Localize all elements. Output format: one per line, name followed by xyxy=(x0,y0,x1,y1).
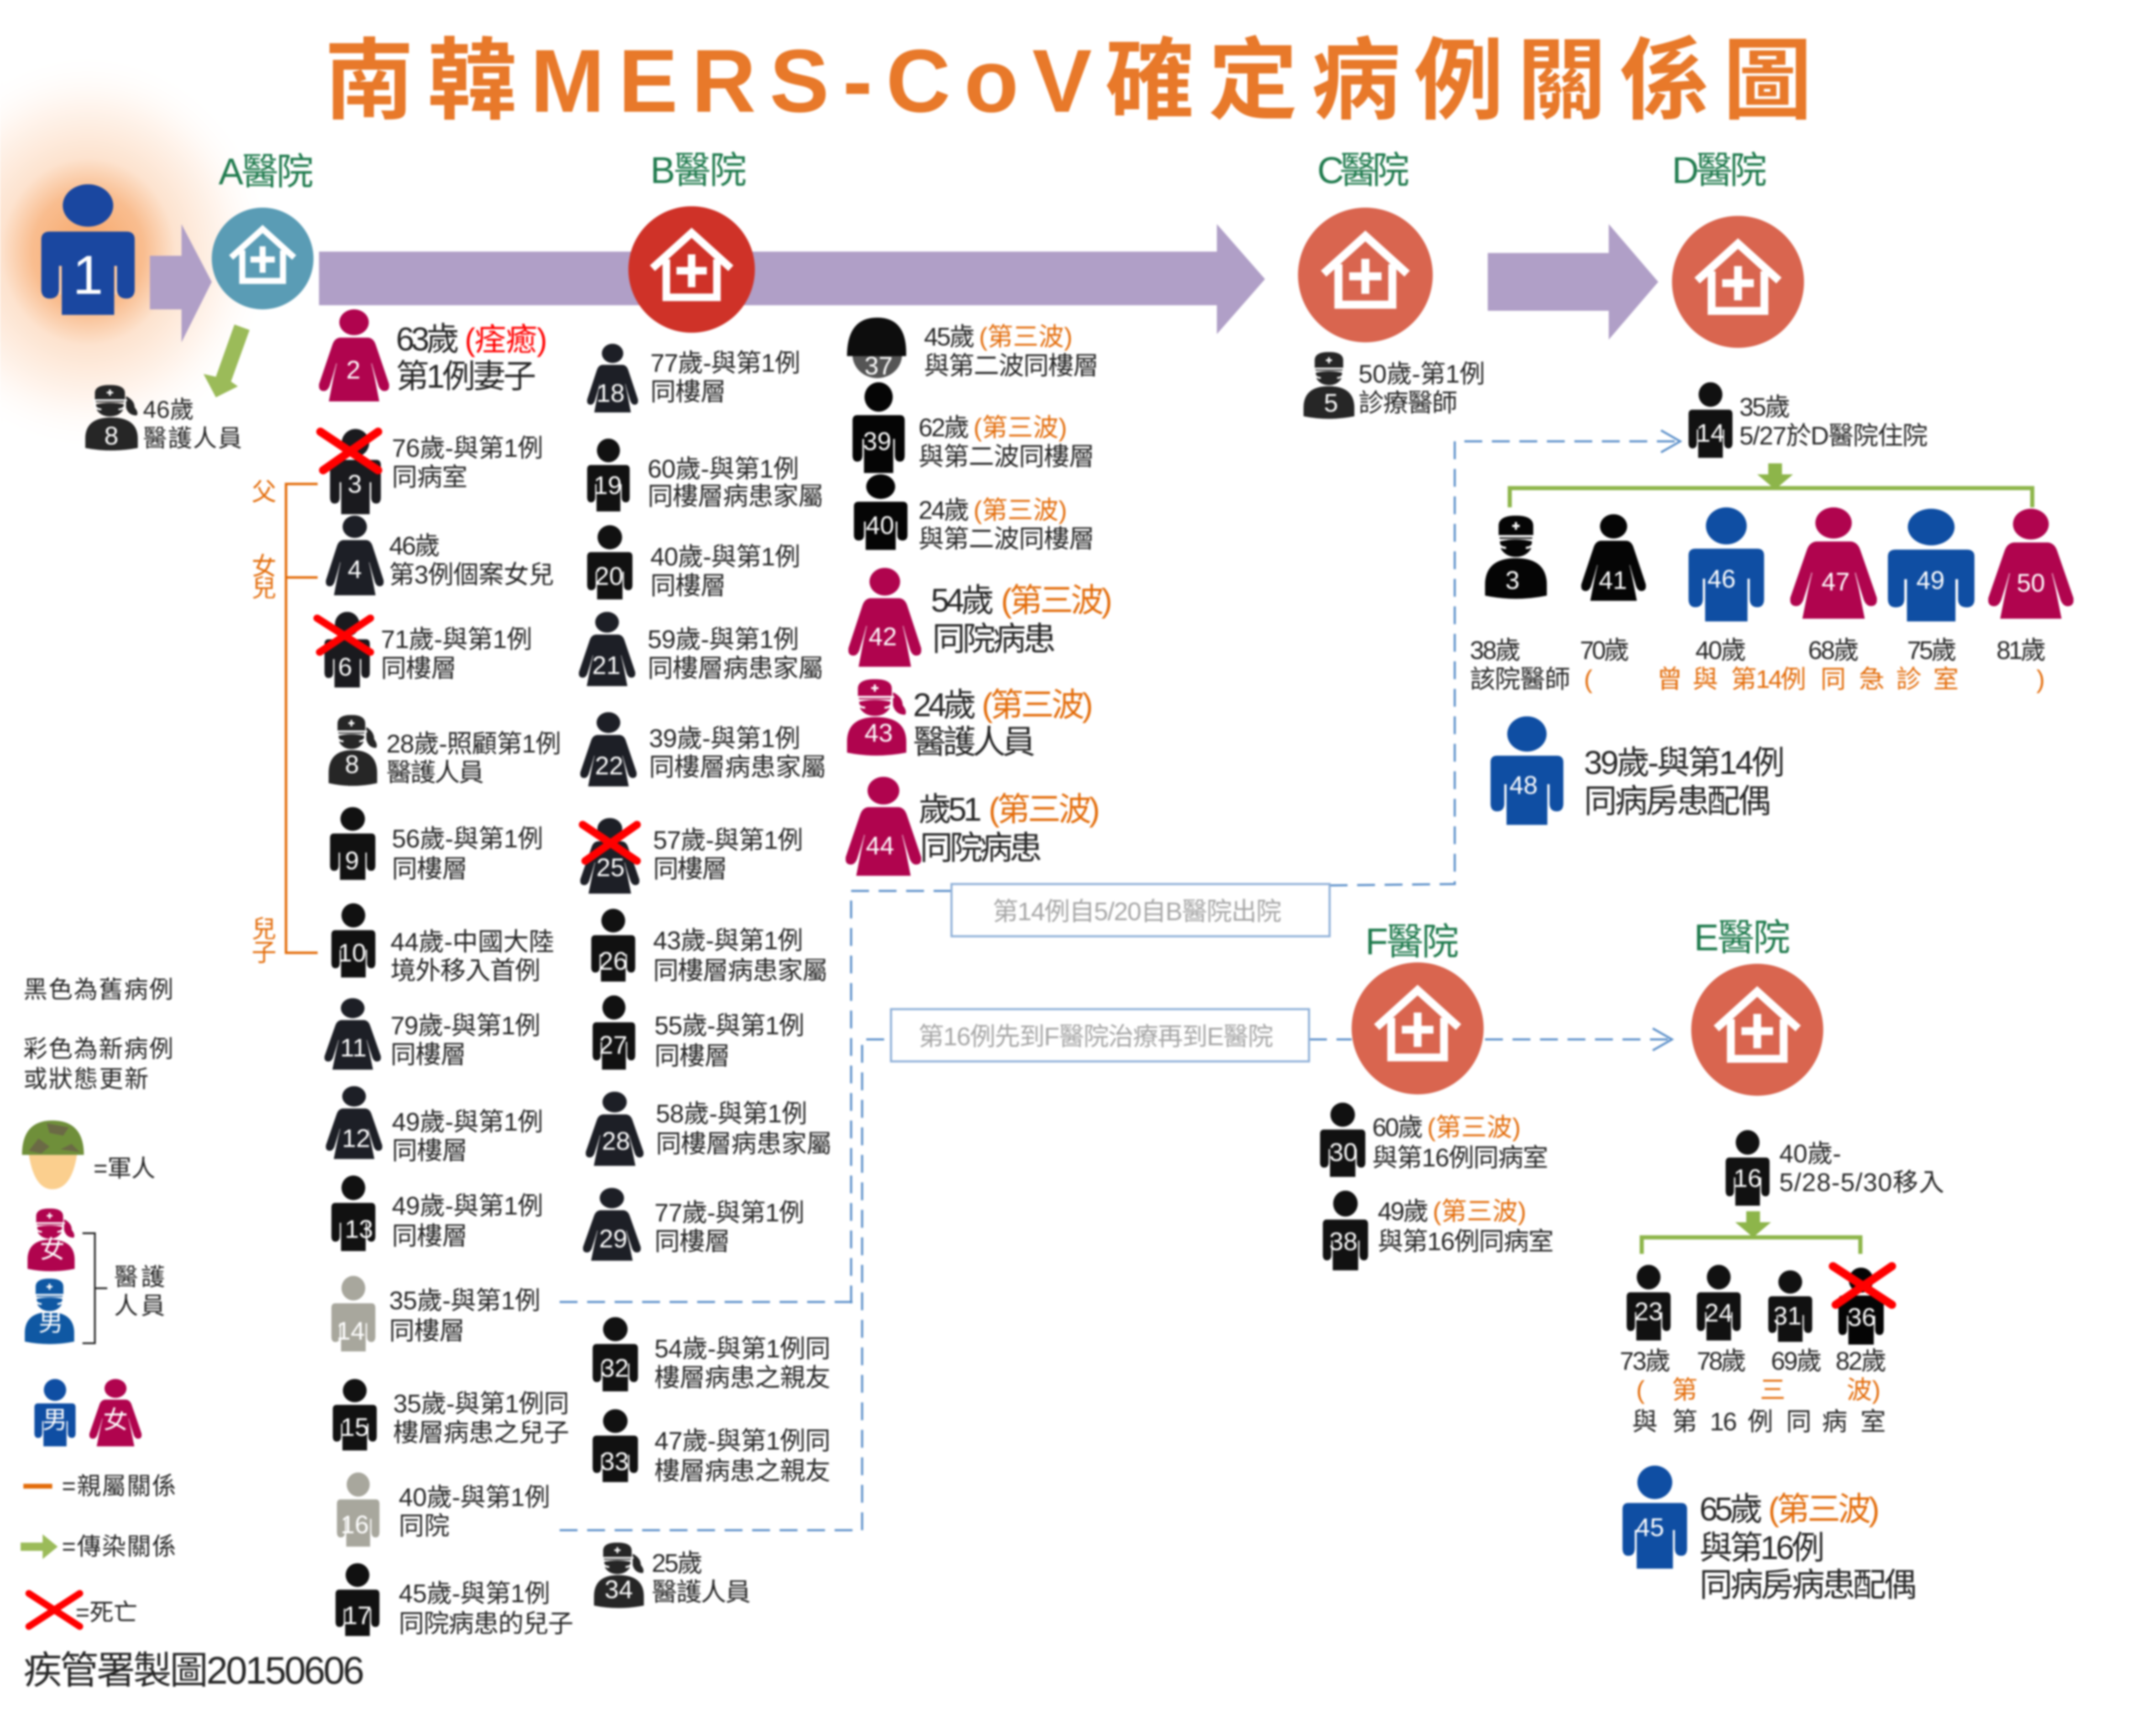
arrow: hospital A to hospital C xyxy=(319,224,1265,334)
case 21 xyxy=(579,612,824,686)
case 20: 40歲-與第1例 xyxy=(650,543,800,571)
case 3: 3 xyxy=(348,470,362,498)
case 8 A hospital nurse: 醫護人員 xyxy=(143,425,242,452)
case 26 xyxy=(591,909,828,985)
case 45: (第三波) xyxy=(1768,1491,1879,1528)
case 34: 醫護人員 xyxy=(652,1578,751,1606)
case 14: 35歲-與第1例 xyxy=(389,1286,540,1315)
ages row: 81歲 xyxy=(1997,636,2046,664)
case 40 xyxy=(854,474,1094,553)
case 40: 40 xyxy=(866,511,894,539)
case 14: 35歲 xyxy=(1739,393,1790,421)
case 30 xyxy=(1320,1102,1548,1177)
ages row xyxy=(1620,1347,1886,1375)
case 44: 歲51 xyxy=(919,792,982,828)
case 1 icon: 1 xyxy=(73,244,103,306)
panel: hospital D cases xyxy=(1470,382,2073,825)
case 43: 43 xyxy=(864,719,893,747)
note box: case 16 xyxy=(891,1009,1309,1061)
case 9: 同樓層 xyxy=(392,855,467,883)
case 44: 44 xyxy=(866,831,894,860)
case 6 xyxy=(317,612,532,687)
case 5: 5 xyxy=(1324,389,1338,417)
case 43: (第三波) xyxy=(982,687,1093,724)
case 4: 第3例個案女兒 xyxy=(389,560,554,589)
case 5: 診療醫師 xyxy=(1359,389,1458,417)
case 45: 同病房病患配偶 xyxy=(1700,1567,1917,1604)
case 50: 50 xyxy=(2017,569,2045,597)
case 42: 42 xyxy=(869,622,897,651)
case 3: 同病室 xyxy=(392,463,467,491)
family bracket: 父 xyxy=(251,479,277,506)
case 6: 71歲-與第1例 xyxy=(381,625,532,653)
case 4: 46歲 xyxy=(389,532,440,560)
case 47 xyxy=(1790,507,1877,619)
case 16: 16 xyxy=(1733,1164,1762,1192)
case 8: 醫護人員 xyxy=(387,758,484,787)
third wave note: ( xyxy=(1636,1376,1645,1404)
case 13: 同樓層 xyxy=(392,1222,467,1250)
case 32: 54歲-與第1例同 xyxy=(654,1335,831,1363)
case 38: 與第16例同病室 xyxy=(1378,1228,1554,1256)
case 17: 17 xyxy=(343,1601,372,1630)
hospital E: E醫院 xyxy=(1694,917,1790,958)
case 39: 62歲 xyxy=(919,413,969,442)
case 21: 同樓層病患家屬 xyxy=(648,654,824,682)
hospital F xyxy=(1352,921,1484,1094)
case 27: 27 xyxy=(599,1031,628,1059)
case 41: 41 xyxy=(1599,566,1627,594)
case 28: 58歲-與第1例 xyxy=(656,1099,807,1128)
case 2: (痊癒) xyxy=(465,322,547,357)
family bracket xyxy=(251,479,318,967)
case 2: 63歲 xyxy=(396,321,459,358)
case 24: 24 xyxy=(1705,1299,1733,1327)
case 11: 同樓層 xyxy=(391,1040,466,1069)
case 48: 39歲-與第14例 xyxy=(1584,745,1785,781)
case 16: 40歲- xyxy=(1779,1139,1841,1168)
note row: 曾與第14例同急診室 xyxy=(1657,665,1959,693)
third wave note xyxy=(1636,1376,1880,1404)
note row xyxy=(1470,665,2045,693)
ages row: 75歲 xyxy=(1907,636,1957,664)
legend: medical staff: 男 xyxy=(38,1309,63,1336)
case 34: 25歲 xyxy=(652,1549,703,1578)
case 25 xyxy=(580,818,803,893)
note row: ) xyxy=(2036,665,2045,693)
case 16: 同院 xyxy=(399,1512,450,1540)
case 2: 第1例妻子 xyxy=(396,359,536,395)
case 20: 同樓層 xyxy=(650,572,726,600)
hospital A xyxy=(212,151,314,309)
case 22: 22 xyxy=(595,752,623,780)
case 28: 28 xyxy=(602,1127,630,1155)
credit: 疾管署製圖20150606 xyxy=(23,1649,364,1692)
case 48: 48 xyxy=(1509,771,1538,799)
legend: family relation: =親屬關係 xyxy=(62,1473,176,1500)
case 34: 34 xyxy=(605,1575,633,1604)
panel: legend xyxy=(21,977,364,1692)
case 12: 12 xyxy=(342,1124,370,1153)
case 47: 47 xyxy=(1821,567,1850,596)
ages row: 78歲 xyxy=(1697,1347,1746,1375)
case 28: 同樓層病患家屬 xyxy=(656,1130,832,1158)
case 39: (第三波) xyxy=(973,413,1067,442)
note box: case 14: 第14例自5/20自B醫院出院 xyxy=(993,898,1282,926)
orange glow behind index case xyxy=(0,52,274,451)
case 43: 24歲 xyxy=(913,687,976,724)
legend: male and female: 女 xyxy=(103,1406,128,1434)
case 19: 60歲-與第1例 xyxy=(648,455,799,483)
case 6: 6 xyxy=(338,653,352,681)
case 42: 同院病患 xyxy=(932,621,1056,658)
dashed path: case 16 transfer via F to E xyxy=(560,1029,1672,1530)
case 46 xyxy=(1689,507,1764,622)
case 6: 同樓層 xyxy=(381,654,456,682)
case 46: 46 xyxy=(1707,564,1736,593)
ages row: 73歲 xyxy=(1620,1347,1670,1375)
case 16: 40歲-與第1例 xyxy=(399,1483,550,1511)
case 27: 同樓層 xyxy=(654,1042,730,1070)
case 17: 同院病患的兒子 xyxy=(399,1609,573,1638)
case 16: 16 xyxy=(340,1510,369,1539)
case 39: 39 xyxy=(863,427,891,455)
case 8 xyxy=(329,715,561,787)
case 32 xyxy=(592,1317,831,1392)
case 29: 同樓層 xyxy=(654,1228,730,1256)
case 39: 與第二波同樓層 xyxy=(919,442,1094,470)
arrow: hospital C to hospital D xyxy=(1488,224,1658,340)
case 45 xyxy=(1622,1466,1917,1604)
case 19: 同樓層病患家屬 xyxy=(648,482,824,511)
hospital A: A醫院 xyxy=(219,151,314,193)
case 44 xyxy=(846,777,1100,876)
panel: hospital B column 1 xyxy=(317,309,573,1638)
legend: soldier: =軍人 xyxy=(94,1155,155,1182)
hospital B xyxy=(628,150,755,333)
case 48 xyxy=(1491,716,1785,825)
legend text: old cases: 黑色為舊病例 xyxy=(23,977,173,1003)
case 17: 45歲-與第1例 xyxy=(399,1579,550,1608)
case 42: (第三波) xyxy=(1001,583,1112,619)
case 36 xyxy=(1833,1266,1892,1345)
case 2 xyxy=(319,309,547,402)
legend: medical staff xyxy=(25,1208,165,1344)
case 18 xyxy=(587,344,800,413)
family bracket: 兒 xyxy=(251,575,277,602)
case 8 A hospital nurse: 8 xyxy=(105,422,119,450)
case 13 xyxy=(331,1176,543,1251)
legend: death: =死亡 xyxy=(76,1599,137,1626)
case 9 xyxy=(330,807,543,883)
case 44: 同院病患 xyxy=(920,830,1042,867)
case 36: 36 xyxy=(1847,1303,1876,1331)
case 38: (第三波) xyxy=(1433,1197,1526,1225)
case 45: 與第16例 xyxy=(1700,1530,1825,1566)
family bracket: 女 xyxy=(251,553,277,580)
case 40: (第三波) xyxy=(973,496,1067,524)
case 31: 31 xyxy=(1774,1301,1802,1330)
family bracket: 兒 xyxy=(251,916,277,943)
case 13: 13 xyxy=(345,1215,373,1243)
case 15 xyxy=(333,1379,569,1451)
case 45: 45 xyxy=(1636,1513,1664,1541)
case 37 soldier: 45歲 xyxy=(924,323,975,351)
green transmission bracket xyxy=(1642,1211,1860,1254)
case 2: 2 xyxy=(346,356,361,384)
case 24 xyxy=(1697,1265,1741,1341)
case 29: 77歲-與第1例 xyxy=(654,1198,804,1227)
case 22: 39歲-與第1例 xyxy=(649,724,800,752)
case 19: 19 xyxy=(594,471,622,500)
legend: medical staff: 人員 xyxy=(114,1293,165,1320)
case 3 xyxy=(320,429,543,514)
ages row: 70歲 xyxy=(1580,636,1629,664)
note row: 該院醫師 xyxy=(1470,665,1570,693)
hospital D xyxy=(1672,150,1804,348)
case 27 xyxy=(592,995,804,1070)
legend: male and female: 男 xyxy=(42,1406,68,1434)
case 41 xyxy=(1581,514,1646,601)
case 45: 65歲 xyxy=(1700,1491,1763,1528)
legend: death xyxy=(29,1594,137,1626)
case 1 icon xyxy=(41,184,135,315)
case 9: 56歲-與第1例 xyxy=(392,825,543,853)
case 15: 樓層病患之兒子 xyxy=(393,1418,569,1447)
case 5: 50歲-第1例 xyxy=(1359,360,1485,388)
case 10 xyxy=(331,903,554,985)
hospital B: B醫院 xyxy=(650,150,747,191)
case 25: 同樓層 xyxy=(653,855,727,883)
ages row: 38歲 xyxy=(1470,636,1521,664)
case 44: (第三波) xyxy=(989,792,1100,828)
case 34 xyxy=(594,1542,751,1608)
case 3 doctor xyxy=(1485,516,1547,599)
hospital F: F醫院 xyxy=(1366,921,1459,962)
case 8 A hospital nurse xyxy=(85,385,242,452)
case 10: 10 xyxy=(338,939,366,967)
ages row: 40歲 xyxy=(1695,636,1746,664)
case 25: 25 xyxy=(597,853,625,882)
case 11 xyxy=(324,998,540,1070)
case 20 xyxy=(587,525,800,600)
case 38: 49歲 xyxy=(1378,1197,1429,1225)
ages row xyxy=(1470,636,2046,664)
case 29: 29 xyxy=(599,1225,628,1253)
case 8: 8 xyxy=(345,750,359,779)
third wave note: 三 xyxy=(1760,1376,1785,1404)
panel: hospital B column 3 xyxy=(846,318,1112,876)
green arrow: A to nurse xyxy=(204,324,250,397)
case 11: 11 xyxy=(340,1034,366,1062)
ages row: 69歲 xyxy=(1771,1347,1822,1375)
case 48: 同病房患配偶 xyxy=(1584,784,1771,820)
case 4: 4 xyxy=(348,555,362,583)
case 37 soldier: (第三波) xyxy=(979,323,1073,351)
case 14: 14 xyxy=(336,1317,365,1345)
ages row: 82歲 xyxy=(1836,1347,1886,1375)
note box: case 14 xyxy=(952,884,1329,936)
case 14 xyxy=(331,1276,540,1352)
legend: transmission relation: =傳染關係 xyxy=(62,1533,176,1560)
arrow: case 1 to hospital A xyxy=(150,224,212,342)
case 26: 26 xyxy=(599,947,628,975)
case 33: 樓層病患之親友 xyxy=(654,1457,831,1485)
case 50 xyxy=(1988,509,2073,619)
family bracket: 子 xyxy=(251,939,277,967)
case 37 soldier: 37 xyxy=(864,351,893,380)
case 18: 18 xyxy=(597,379,625,408)
case 40: 24歲 xyxy=(919,496,969,524)
case 23 xyxy=(1627,1265,1670,1341)
legend text: new cases: 或狀態更新 xyxy=(23,1066,148,1093)
case 38 xyxy=(1323,1191,1554,1270)
case 11: 79歲-與第1例 xyxy=(391,1012,540,1040)
case 38: 38 xyxy=(1329,1228,1357,1256)
case 27: 55歲-與第1例 xyxy=(654,1012,804,1040)
hospital C xyxy=(1298,150,1433,342)
case 33: 33 xyxy=(601,1447,629,1476)
hospital C: C醫院 xyxy=(1317,150,1409,191)
case 40: 與第二波同樓層 xyxy=(919,525,1094,553)
legend text: new cases xyxy=(23,1035,173,1093)
case 30: 與第16例同病室 xyxy=(1372,1144,1548,1172)
case 8 A hospital nurse: 46歲 xyxy=(143,396,194,423)
case 37 soldier xyxy=(847,318,1099,380)
case 14 xyxy=(1689,382,1928,458)
case 18: 同樓層 xyxy=(650,378,726,406)
case 49: 49 xyxy=(1916,566,1945,594)
case 30: (第三波) xyxy=(1427,1113,1521,1142)
case 22: 同樓層病患家屬 xyxy=(649,753,827,781)
case 33: 47歲-與第1例同 xyxy=(654,1426,831,1455)
case 49 xyxy=(1888,509,1974,622)
case 21: 21 xyxy=(592,651,621,679)
case 43 xyxy=(847,679,1093,761)
green transmission bracket xyxy=(1510,463,2032,507)
case 10: 44歲-中國大陸 xyxy=(391,928,554,956)
case 17 xyxy=(335,1563,573,1638)
case 12 xyxy=(326,1086,543,1165)
case 16: 5/28-5/30移入 xyxy=(1779,1168,1944,1197)
case 3 doctor: 3 xyxy=(1506,566,1520,594)
case 37 soldier: 與第二波同樓層 xyxy=(924,351,1099,380)
third wave note: 第 xyxy=(1672,1376,1697,1404)
hospital D: D醫院 xyxy=(1672,150,1767,191)
title: 南韓MERS-CoV確定病例關係圖 xyxy=(324,31,1812,131)
case 43: 醫護人員 xyxy=(913,724,1036,761)
case 21: 59歲-與第1例 xyxy=(648,625,799,653)
case 32: 32 xyxy=(601,1354,629,1382)
panel: hospital B column 2 xyxy=(579,344,832,1608)
case 5 xyxy=(1303,352,1485,419)
case 9: 9 xyxy=(345,846,359,875)
dashed path: case 14 transfer from B to D xyxy=(560,430,1680,1303)
case 16 xyxy=(337,1473,550,1547)
case 14: 5/27於D醫院住院 xyxy=(1739,422,1928,450)
case 42 xyxy=(848,568,1112,667)
case 15: 35歲-與第1例同 xyxy=(393,1390,569,1418)
case 25: 57歲-與第1例 xyxy=(653,826,803,854)
case 42: 54歲 xyxy=(931,583,994,619)
case 39 xyxy=(853,382,1094,473)
case 23: 23 xyxy=(1634,1297,1663,1326)
case 26: 同樓層病患家屬 xyxy=(653,956,828,985)
case 29 xyxy=(583,1188,804,1261)
case 12: 同樓層 xyxy=(392,1137,467,1165)
ages row: 68歲 xyxy=(1808,636,1859,664)
case 30: 60歲 xyxy=(1372,1113,1423,1142)
note box: case 16: 第16例先到F醫院治療再到E醫院 xyxy=(919,1023,1273,1051)
case 4 xyxy=(326,516,554,596)
case 14: 14 xyxy=(1696,419,1725,447)
panel: hospital E cases xyxy=(1620,1130,1944,1604)
case 32: 樓層病患之親友 xyxy=(654,1364,831,1392)
legend: soldier xyxy=(22,1120,155,1189)
legend: medical staff: 醫護 xyxy=(114,1264,165,1291)
case 10: 境外移入首例 xyxy=(391,956,540,985)
case 31 xyxy=(1768,1270,1812,1342)
case 14: 同樓層 xyxy=(389,1317,465,1345)
case 26: 43歲-與第1例 xyxy=(653,926,803,955)
case 13: 49歲-與第1例 xyxy=(392,1191,543,1220)
panel: hospital F cases xyxy=(1320,1102,1554,1270)
case 22 xyxy=(580,712,827,786)
case 19 xyxy=(587,439,824,512)
case 20: 20 xyxy=(595,562,623,590)
case 33 xyxy=(592,1409,831,1485)
case 16 xyxy=(1726,1130,1944,1206)
case 3: 76歲-與第1例 xyxy=(392,434,543,462)
note row: ( xyxy=(1584,665,1593,693)
case 18: 77歲-與第1例 xyxy=(650,349,800,377)
case 8: 28歲-照顧第1例 xyxy=(387,730,561,758)
legend: medical staff: 女 xyxy=(40,1236,65,1264)
same room note: 與第16例同病室 xyxy=(1632,1407,1886,1436)
case 30: 30 xyxy=(1329,1138,1357,1166)
case 15: 15 xyxy=(340,1413,369,1441)
third wave note: 波) xyxy=(1847,1376,1880,1404)
legend: male and female xyxy=(34,1379,141,1446)
hospital E xyxy=(1691,917,1823,1096)
case 28 xyxy=(586,1092,832,1166)
case 12: 49歲-與第1例 xyxy=(392,1108,543,1136)
legend text: new cases: 彩色為新病例 xyxy=(23,1035,173,1062)
